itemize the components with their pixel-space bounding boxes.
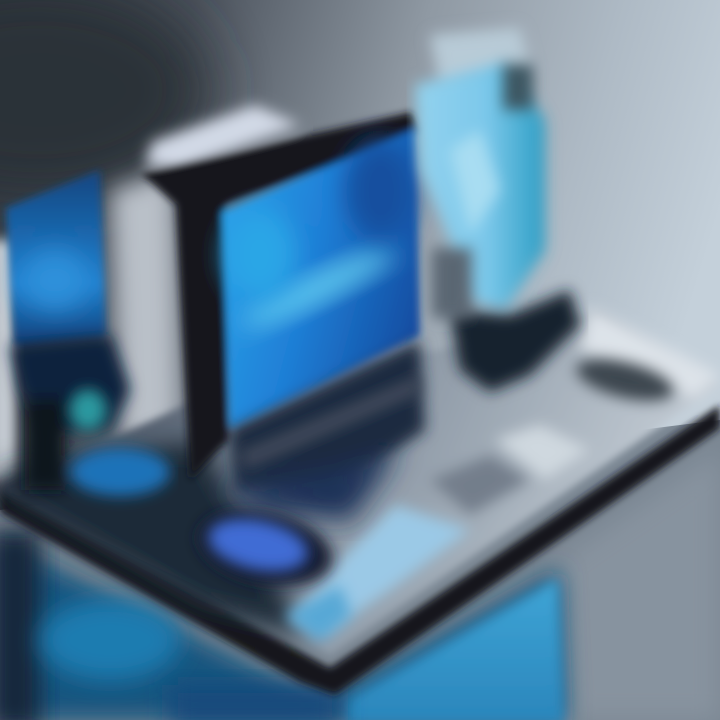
- light panel on platform: [290, 505, 470, 635]
- monitor: [140, 105, 425, 520]
- platform top surface: [0, 310, 720, 655]
- tile: gray: [430, 455, 530, 515]
- phone stand: [10, 335, 130, 430]
- tube body: [415, 62, 545, 310]
- tile: dark device: [572, 350, 678, 410]
- phone screen: [6, 170, 106, 345]
- platform dark edge: [0, 405, 720, 695]
- platform: [0, 308, 720, 695]
- monitor screen: [222, 128, 420, 428]
- monitor frame: [140, 112, 420, 480]
- left phone: [6, 170, 170, 496]
- dark cup: [450, 290, 580, 392]
- monitor base: [230, 340, 425, 495]
- monitor top cap: [145, 105, 300, 170]
- phone base: [70, 448, 170, 496]
- blue mouse pad: [191, 499, 339, 597]
- lower floor and reflection: [0, 420, 720, 720]
- tube top: [430, 28, 530, 85]
- right tube device: [415, 28, 580, 392]
- tile: white: [495, 425, 590, 480]
